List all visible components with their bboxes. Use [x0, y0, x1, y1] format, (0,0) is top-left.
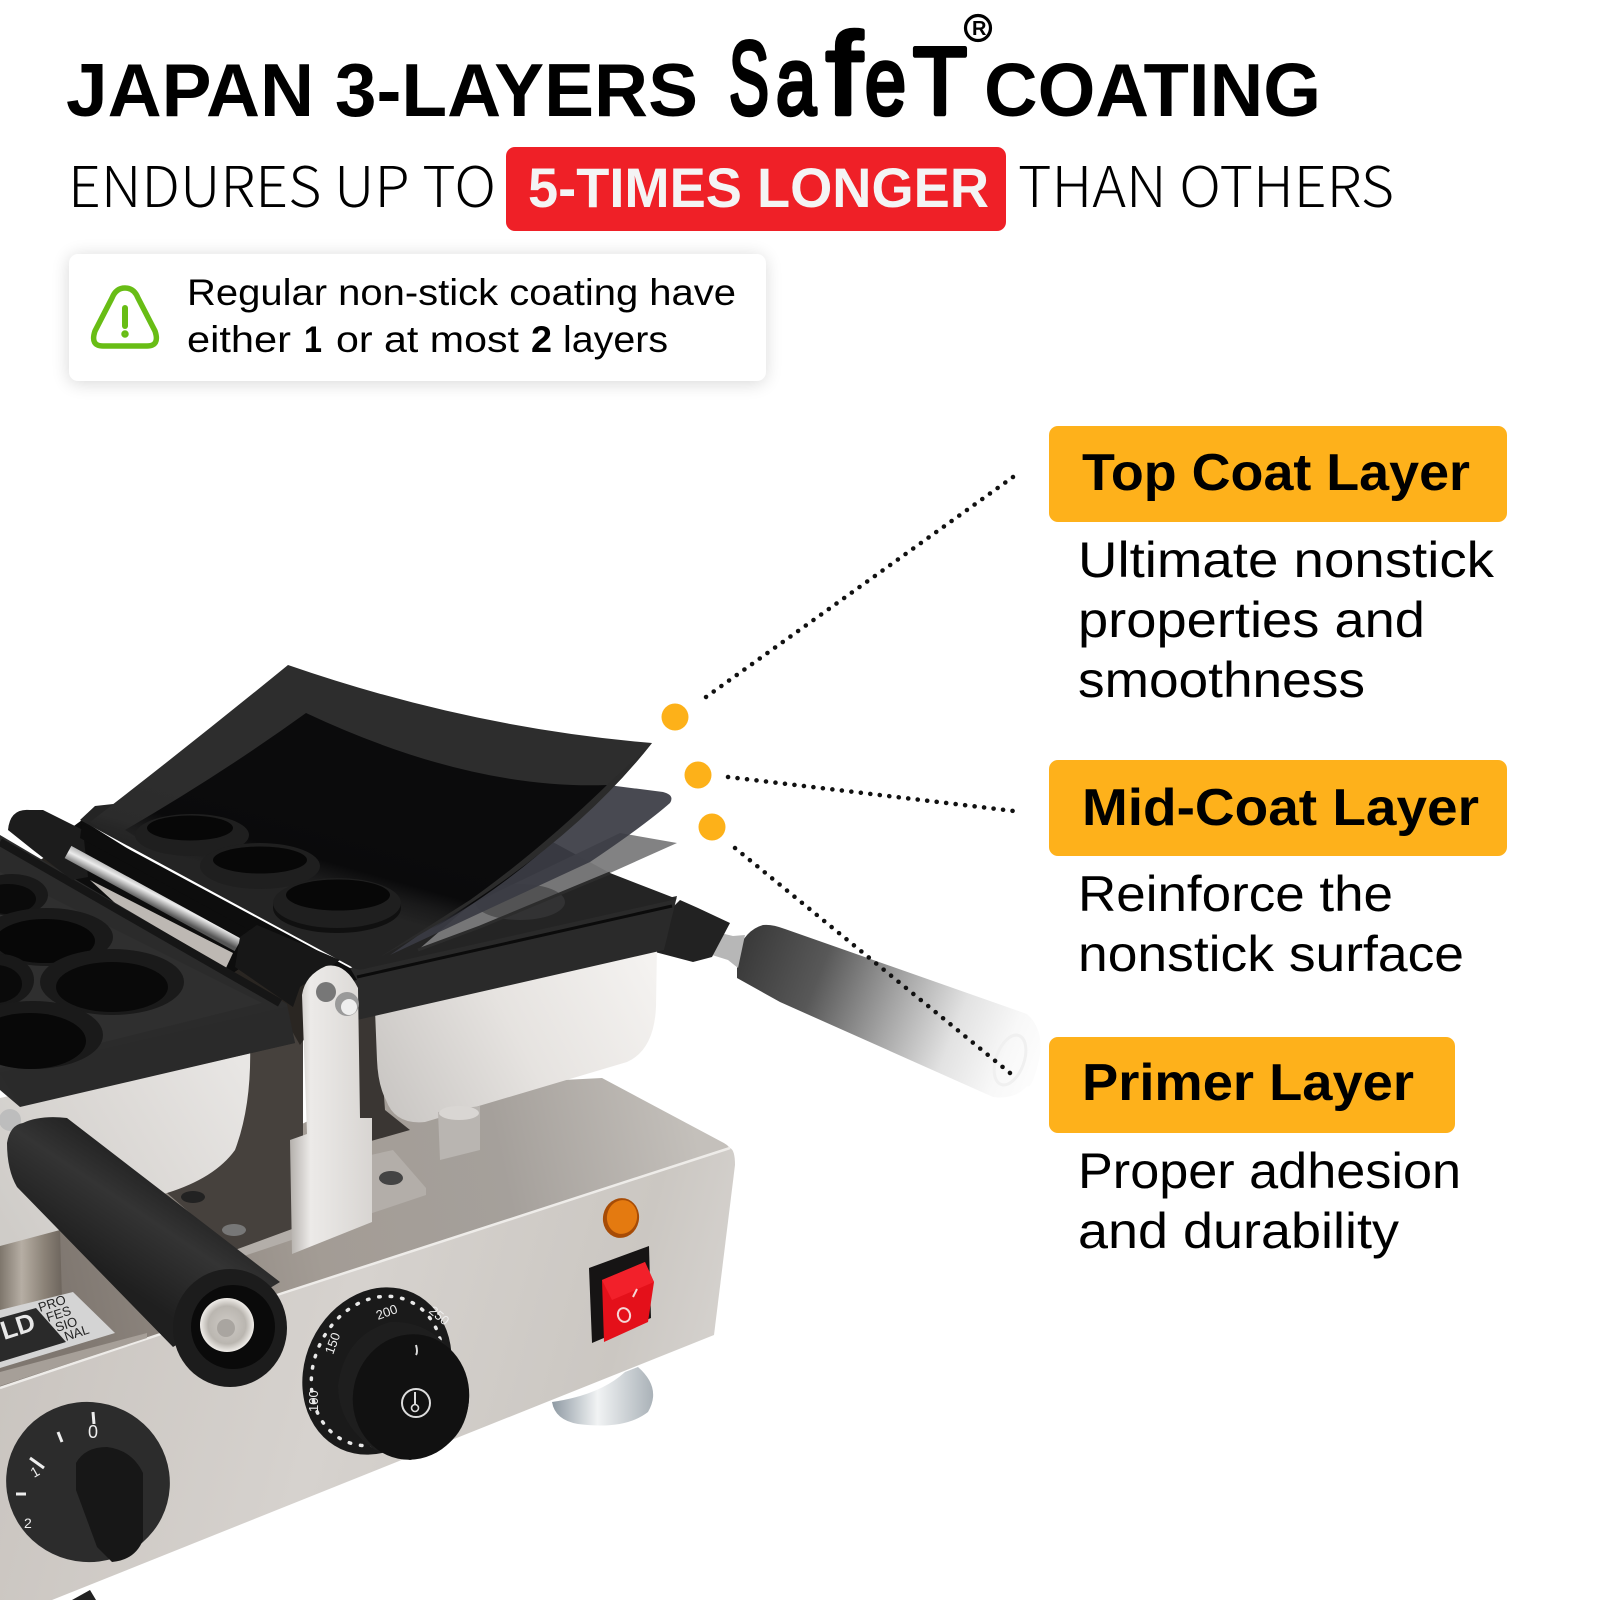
description: primer: and durability	[1078, 1203, 1399, 1259]
rear foot stub	[72, 1590, 96, 1600]
right hinge block	[655, 900, 730, 962]
mode dial	[0, 1384, 188, 1580]
temperature dial: 100	[306, 1390, 321, 1412]
first film: top coat	[90, 665, 652, 968]
panel: mid-coat layer: Mid-Coat Layer	[1082, 779, 1479, 837]
description: top coat: properties and	[1078, 592, 1425, 648]
mode dial pointer	[76, 1447, 143, 1562]
mode dial: 2	[24, 1515, 32, 1531]
callout: regular coating note	[69, 254, 766, 383]
description: mid-coat: Reinforce the	[1078, 866, 1393, 922]
leader: mid-coat	[728, 777, 1014, 811]
description: top coat	[1078, 532, 1495, 708]
title: COATING	[984, 48, 1321, 132]
third film: primer	[418, 833, 677, 950]
front handle	[0, 1109, 287, 1387]
brand plate	[0, 1292, 147, 1386]
callout: regular coating note: or at most	[336, 319, 520, 360]
panel: top coat layer: Top Coat Layer	[1082, 444, 1470, 502]
description: top coat: smoothness	[1078, 652, 1365, 708]
panel: top coat layer	[1049, 426, 1507, 708]
icon: warning triangle	[94, 288, 156, 346]
callout: regular coating note: either	[187, 319, 291, 360]
panel: primer layer: Primer Layer	[1082, 1054, 1414, 1112]
second film: mid-coat	[390, 785, 671, 955]
waffle machine illustration	[0, 665, 1040, 1600]
right handle fading out	[708, 925, 1040, 1098]
left tray	[0, 835, 295, 1107]
hinge rod	[68, 852, 238, 945]
handle threaded bolt	[708, 930, 745, 968]
title: JAPAN 3-LAYERS	[66, 48, 698, 132]
gap behind rod	[55, 820, 250, 975]
SafeT logo wordmark: a	[776, 28, 816, 135]
panel: mid-coat layer	[1049, 760, 1507, 982]
right silver pan	[375, 945, 657, 1122]
brand plate: FES	[44, 1303, 73, 1325]
SafeT logo wordmark: f	[826, 9, 863, 139]
temperature dial: 250	[426, 1303, 452, 1328]
SafeT logo wordmark	[729, 9, 990, 139]
leader: primer	[735, 848, 1010, 1073]
leader: top coat	[706, 477, 1013, 697]
temperature dial	[275, 1263, 481, 1479]
left silver pan	[0, 1042, 250, 1246]
temperature dial: 200	[374, 1301, 399, 1323]
SafeT logo wordmark: T	[913, 28, 967, 135]
description: mid-coat	[1078, 866, 1464, 982]
panel: primer layer	[1049, 1037, 1461, 1259]
dot: top coat	[662, 704, 688, 730]
tray rings	[135, 814, 401, 933]
red highlight badge: 5-TIMES LONGER	[528, 156, 989, 219]
foot	[552, 1367, 653, 1426]
callout: regular coating note: Regular non-stick coating have	[187, 272, 736, 313]
SafeT logo wordmark: e	[865, 28, 906, 135]
right tray	[80, 770, 677, 1020]
dot: primer	[698, 814, 726, 840]
base leg	[0, 1230, 62, 1318]
callout: regular coating note: 2	[531, 319, 552, 360]
brand plate: NAL	[62, 1322, 91, 1344]
title	[66, 9, 1321, 139]
indicator lamp	[599, 1195, 643, 1241]
subtitle: ENDURES UP TO	[68, 143, 496, 224]
SafeT logo wordmark: R	[972, 18, 987, 40]
pan foot post	[438, 1106, 480, 1160]
description: mid-coat: nonstick surface	[1078, 926, 1464, 982]
front hinge	[235, 925, 340, 1007]
mode dial: 1	[28, 1463, 42, 1481]
mode dial: 0	[88, 1422, 98, 1442]
power switch	[589, 1246, 654, 1343]
dot: mid-coat	[684, 762, 712, 788]
brand plate: PRO	[36, 1292, 68, 1315]
brand plate: SIO	[53, 1314, 79, 1335]
base top surface	[0, 1078, 730, 1388]
callout: regular coating note: layers	[563, 319, 668, 360]
callout: regular coating note: 1	[304, 319, 322, 360]
subtitle	[68, 143, 1394, 231]
bracket	[181, 965, 426, 1258]
subtitle: THAN OTHERS	[1018, 143, 1394, 224]
temperature dial: 150	[322, 1331, 343, 1356]
coating layer films	[90, 665, 677, 968]
front panel	[0, 1148, 735, 1600]
shadow backing between trays	[40, 830, 350, 1045]
rear hinge	[8, 810, 88, 880]
description: primer	[1078, 1143, 1461, 1259]
description: top coat: Ultimate nonstick	[1078, 532, 1495, 588]
dark recess behind pans	[167, 1030, 303, 1252]
description: primer: Proper adhesion	[1078, 1143, 1461, 1199]
dial knob	[338, 1322, 481, 1471]
SafeT logo wordmark: S	[729, 21, 769, 137]
